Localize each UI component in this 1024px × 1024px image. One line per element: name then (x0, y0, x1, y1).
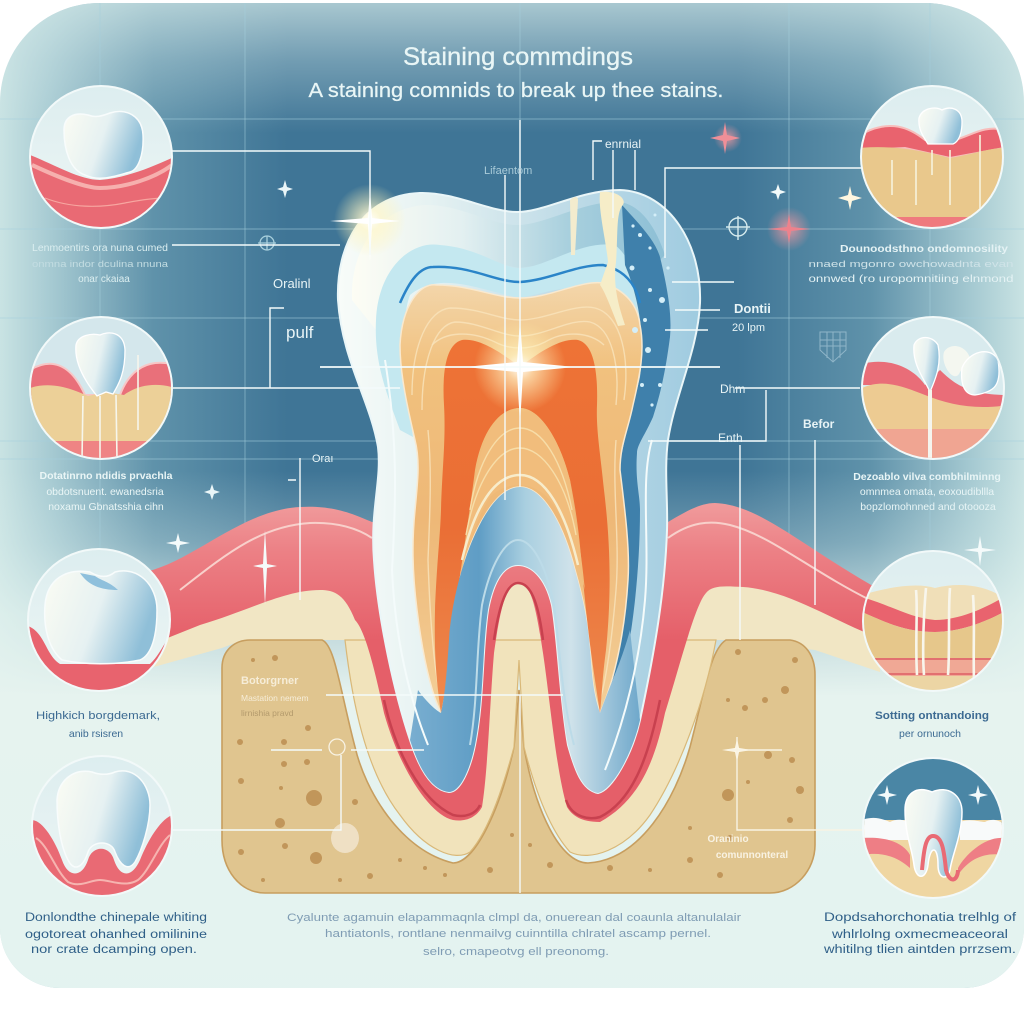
text block: right 4: Dopdsahorchonatia trelhlg of (824, 912, 1017, 924)
circle: left 1 (29, 85, 173, 229)
small icon: grid shield (820, 332, 846, 362)
labels (273, 137, 835, 465)
enamel outer (338, 190, 700, 793)
text block: right 2: Dezoablo vilva combhilminng (853, 471, 1001, 483)
label: 20 pm: 20 lpm (732, 322, 765, 334)
bone labels (241, 675, 309, 718)
bone blob (331, 823, 359, 853)
label: enamel: enrnial (605, 137, 641, 151)
cream arch line (462, 475, 578, 565)
right side text blocks: onnwed (ro uropomnitiing elnmond (808, 274, 1014, 285)
circle: right 1 (860, 85, 1010, 235)
label: enth: Enth (718, 431, 743, 445)
left side text blocks (32, 243, 169, 285)
top enamel band (352, 202, 665, 330)
title (308, 43, 724, 102)
circle: right 4 (862, 757, 1004, 899)
text block: left 2: Dotatinrno ndidis prvachla (39, 470, 173, 482)
text: hantiatonls, rontlane nenmailvg cuinntilla chlratel ascamp pernel. (325, 928, 711, 940)
label: bone right note: comunnonteral (716, 850, 788, 861)
text: whlrlolng oxmecmeaceoral (831, 929, 1008, 941)
label: pulf: pulf (286, 323, 314, 342)
blue arch between roots (410, 487, 640, 793)
label: bone text: Mastation nemem (241, 693, 309, 703)
small icon: crystal (258, 236, 276, 250)
text block: centre bottom: Cyalunte agamuin elapammaqnla clmpl da, onuerean dal coaunla altanulalair (287, 912, 741, 924)
label: bone heading: Botorgrner (241, 675, 299, 687)
circle: right 2 (858, 315, 1008, 465)
right side text blocks (808, 244, 1014, 285)
cream root wrap (345, 640, 716, 855)
text: anib rsisren (69, 728, 123, 740)
label: oralinl: Oralinl (273, 276, 311, 291)
pulp (435, 340, 610, 713)
label: dim: Dhm (720, 382, 745, 396)
text: obdotsnuent. ewanedsria (46, 486, 164, 498)
circle: left 3 (25, 545, 175, 695)
connector lines (170, 120, 866, 893)
text: omnmea omata, eoxoudibllla (860, 486, 994, 498)
left side text blocks: onar ckaiaa (78, 274, 130, 285)
text: per ornunoch (899, 728, 961, 740)
text block: left 3: Highkich borgdemark, (36, 710, 160, 722)
circle: left 4 (31, 755, 173, 897)
blue and red lines (400, 265, 640, 303)
glitter on enamel (630, 214, 670, 407)
yellow arch (458, 408, 585, 590)
label: ligament: Lifaentom (484, 165, 532, 177)
panel: bone block (222, 640, 815, 893)
text block: right 1: Dounoodsthno ondomnosility (840, 244, 1009, 255)
dark blue right band (595, 205, 671, 780)
cream streak (600, 192, 625, 326)
label: bone right note (707, 834, 788, 861)
circle: left 2 (25, 315, 175, 465)
text: bopzlomohnned and otoooza (860, 501, 996, 513)
sparkles (166, 122, 996, 762)
arch contour stripes (466, 428, 576, 535)
label: dontii: Dontii (734, 301, 771, 316)
white root contour lines (385, 360, 652, 770)
label: befor: Befor (803, 417, 835, 431)
text: whitilng tlien aintden prrzsem. (823, 944, 1016, 956)
label: bone right note: Oraninio (707, 834, 749, 845)
dentin (400, 283, 642, 713)
text: noxamu Gbnatsshia cihn (48, 501, 164, 513)
text block: left 1: Lenmoentirs ora nuna cumed (32, 243, 168, 254)
left side text blocks: onmna indor dculina nnuna (32, 259, 169, 270)
right side text blocks: nnaed mgonro owchowadnta evan (808, 259, 1014, 270)
text block: left 4: Donlondthe chinepale whiting (25, 912, 207, 924)
text: nor crate dcamping open. (31, 944, 197, 956)
small icon: target (726, 216, 750, 240)
label: bone text line: lirnishia pravd (241, 708, 294, 718)
bone pores (237, 649, 804, 882)
text block: right 3: Sotting ontnandoing (875, 710, 989, 722)
pale inner root arch (470, 540, 574, 745)
panel: gum (140, 503, 880, 822)
text: selro, cmapeotvg ell preonomg. (423, 946, 609, 958)
title: Staining commdings (403, 43, 633, 71)
dentin contour stripes (412, 307, 626, 700)
label: oral: Oraı (312, 453, 333, 465)
subtitle: A staining comnids to break up thee stains. (308, 80, 724, 102)
circle: right 3 (862, 550, 1004, 692)
tooth cross-section (338, 190, 700, 793)
panel: cream bone layer (150, 548, 880, 672)
cyan inner enamel band (376, 244, 645, 437)
small ring icon on bone (329, 739, 345, 755)
text: ogotoreat ohanhed omilinine (25, 929, 207, 941)
